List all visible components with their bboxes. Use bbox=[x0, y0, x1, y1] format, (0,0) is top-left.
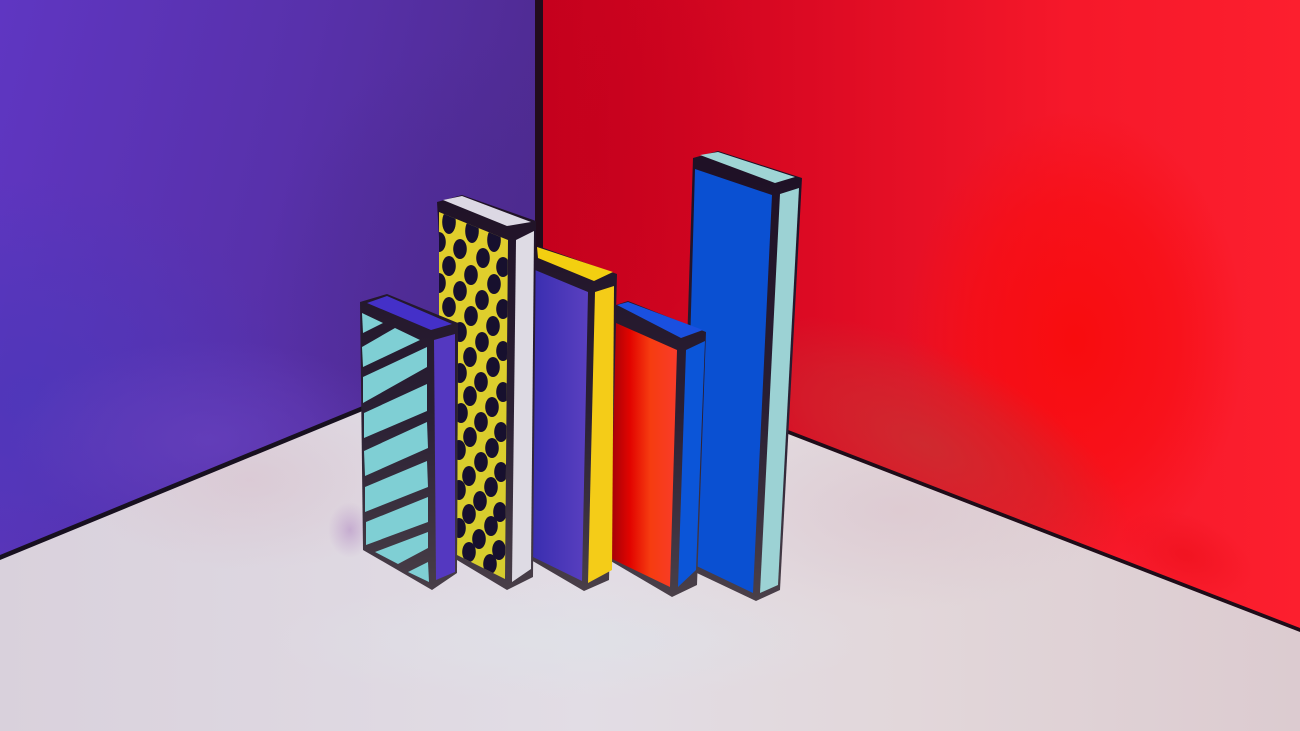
side face bbox=[434, 334, 455, 580]
side face bbox=[760, 188, 799, 593]
front face bbox=[684, 169, 772, 593]
right wall: red bbox=[543, 0, 1300, 628]
front face bbox=[610, 323, 677, 587]
side face bbox=[588, 286, 614, 583]
front face with polka dots bbox=[439, 212, 508, 579]
bar 1: teal striped bar with purple top and side bbox=[360, 294, 458, 590]
bar 5: tall blue bar with pale teal side bbox=[680, 151, 802, 601]
top face bbox=[443, 196, 531, 226]
top face bbox=[617, 302, 703, 338]
top face bbox=[367, 296, 452, 330]
side face bbox=[512, 231, 534, 582]
top face bbox=[537, 247, 613, 281]
bar 4: red bar with blue top and side bbox=[609, 301, 706, 597]
front face bbox=[533, 270, 588, 581]
bar 2: yellow polka dot bar with white side bbox=[430, 195, 536, 590]
top face bbox=[700, 152, 795, 183]
left wall: purple bbox=[0, 0, 535, 555]
bar 3: purple bar with yellow top and side bbox=[531, 246, 617, 591]
side face bbox=[678, 341, 705, 587]
teal stripes on front face bbox=[362, 313, 429, 582]
floor: pale lilac bbox=[0, 436, 1300, 731]
